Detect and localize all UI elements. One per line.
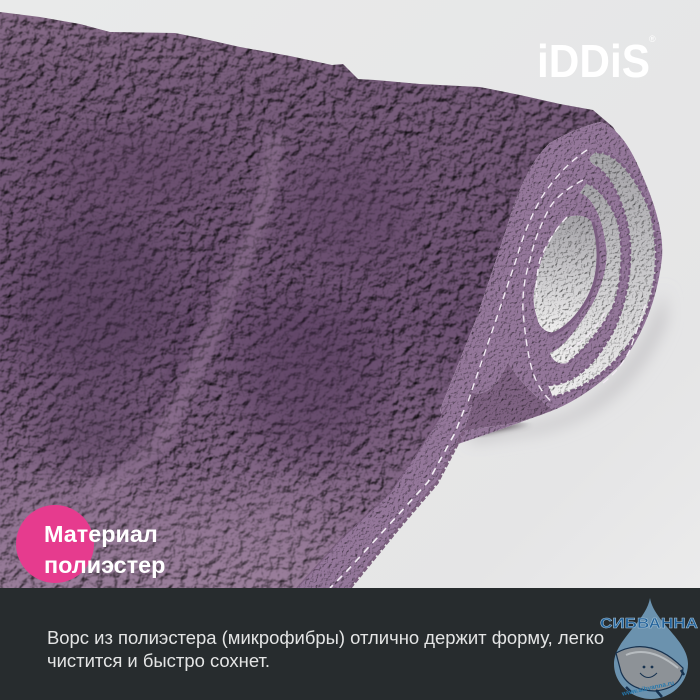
badge heading: Материал [44, 521, 158, 547]
binding along the rug's front edge [297, 405, 472, 588]
smiling bath tub [616, 647, 684, 697]
ring edges in darker thread [553, 152, 656, 397]
website address: www.sibvanna.ru [620, 680, 675, 698]
roll end with binding and spiral [440, 122, 662, 447]
brand logo: IDDIS: iDDiS [537, 35, 650, 87]
caption text: Ворс из полиэстера (микрофибры) отлично держит форму, легко [47, 627, 604, 648]
brand logo: IDDIS: ® [649, 34, 656, 44]
outer binding of the roll [440, 122, 662, 445]
floor shadow under the roll [470, 290, 666, 442]
caption text [47, 627, 604, 671]
badge heading: полиэстер [44, 552, 165, 578]
non-slip backing, outer turn [548, 152, 656, 397]
water drop [614, 598, 688, 699]
caption text: чистится и быстро сохнет. [47, 650, 270, 671]
product photo: rolled purple bath mat [0, 12, 674, 588]
white stitching [453, 150, 647, 447]
pink badge circle [16, 505, 94, 583]
badge heading [44, 521, 165, 578]
backing, inner core [534, 216, 598, 332]
brand name: СИБВАННА [600, 616, 699, 632]
darker and lighter pile patches [25, 130, 415, 470]
seam ridge in pile [90, 135, 275, 495]
backing, middle turn [550, 183, 621, 363]
bottom dark caption panel [0, 588, 700, 700]
pile peeking under the roll [460, 362, 553, 432]
rug pile surface [0, 12, 640, 588]
